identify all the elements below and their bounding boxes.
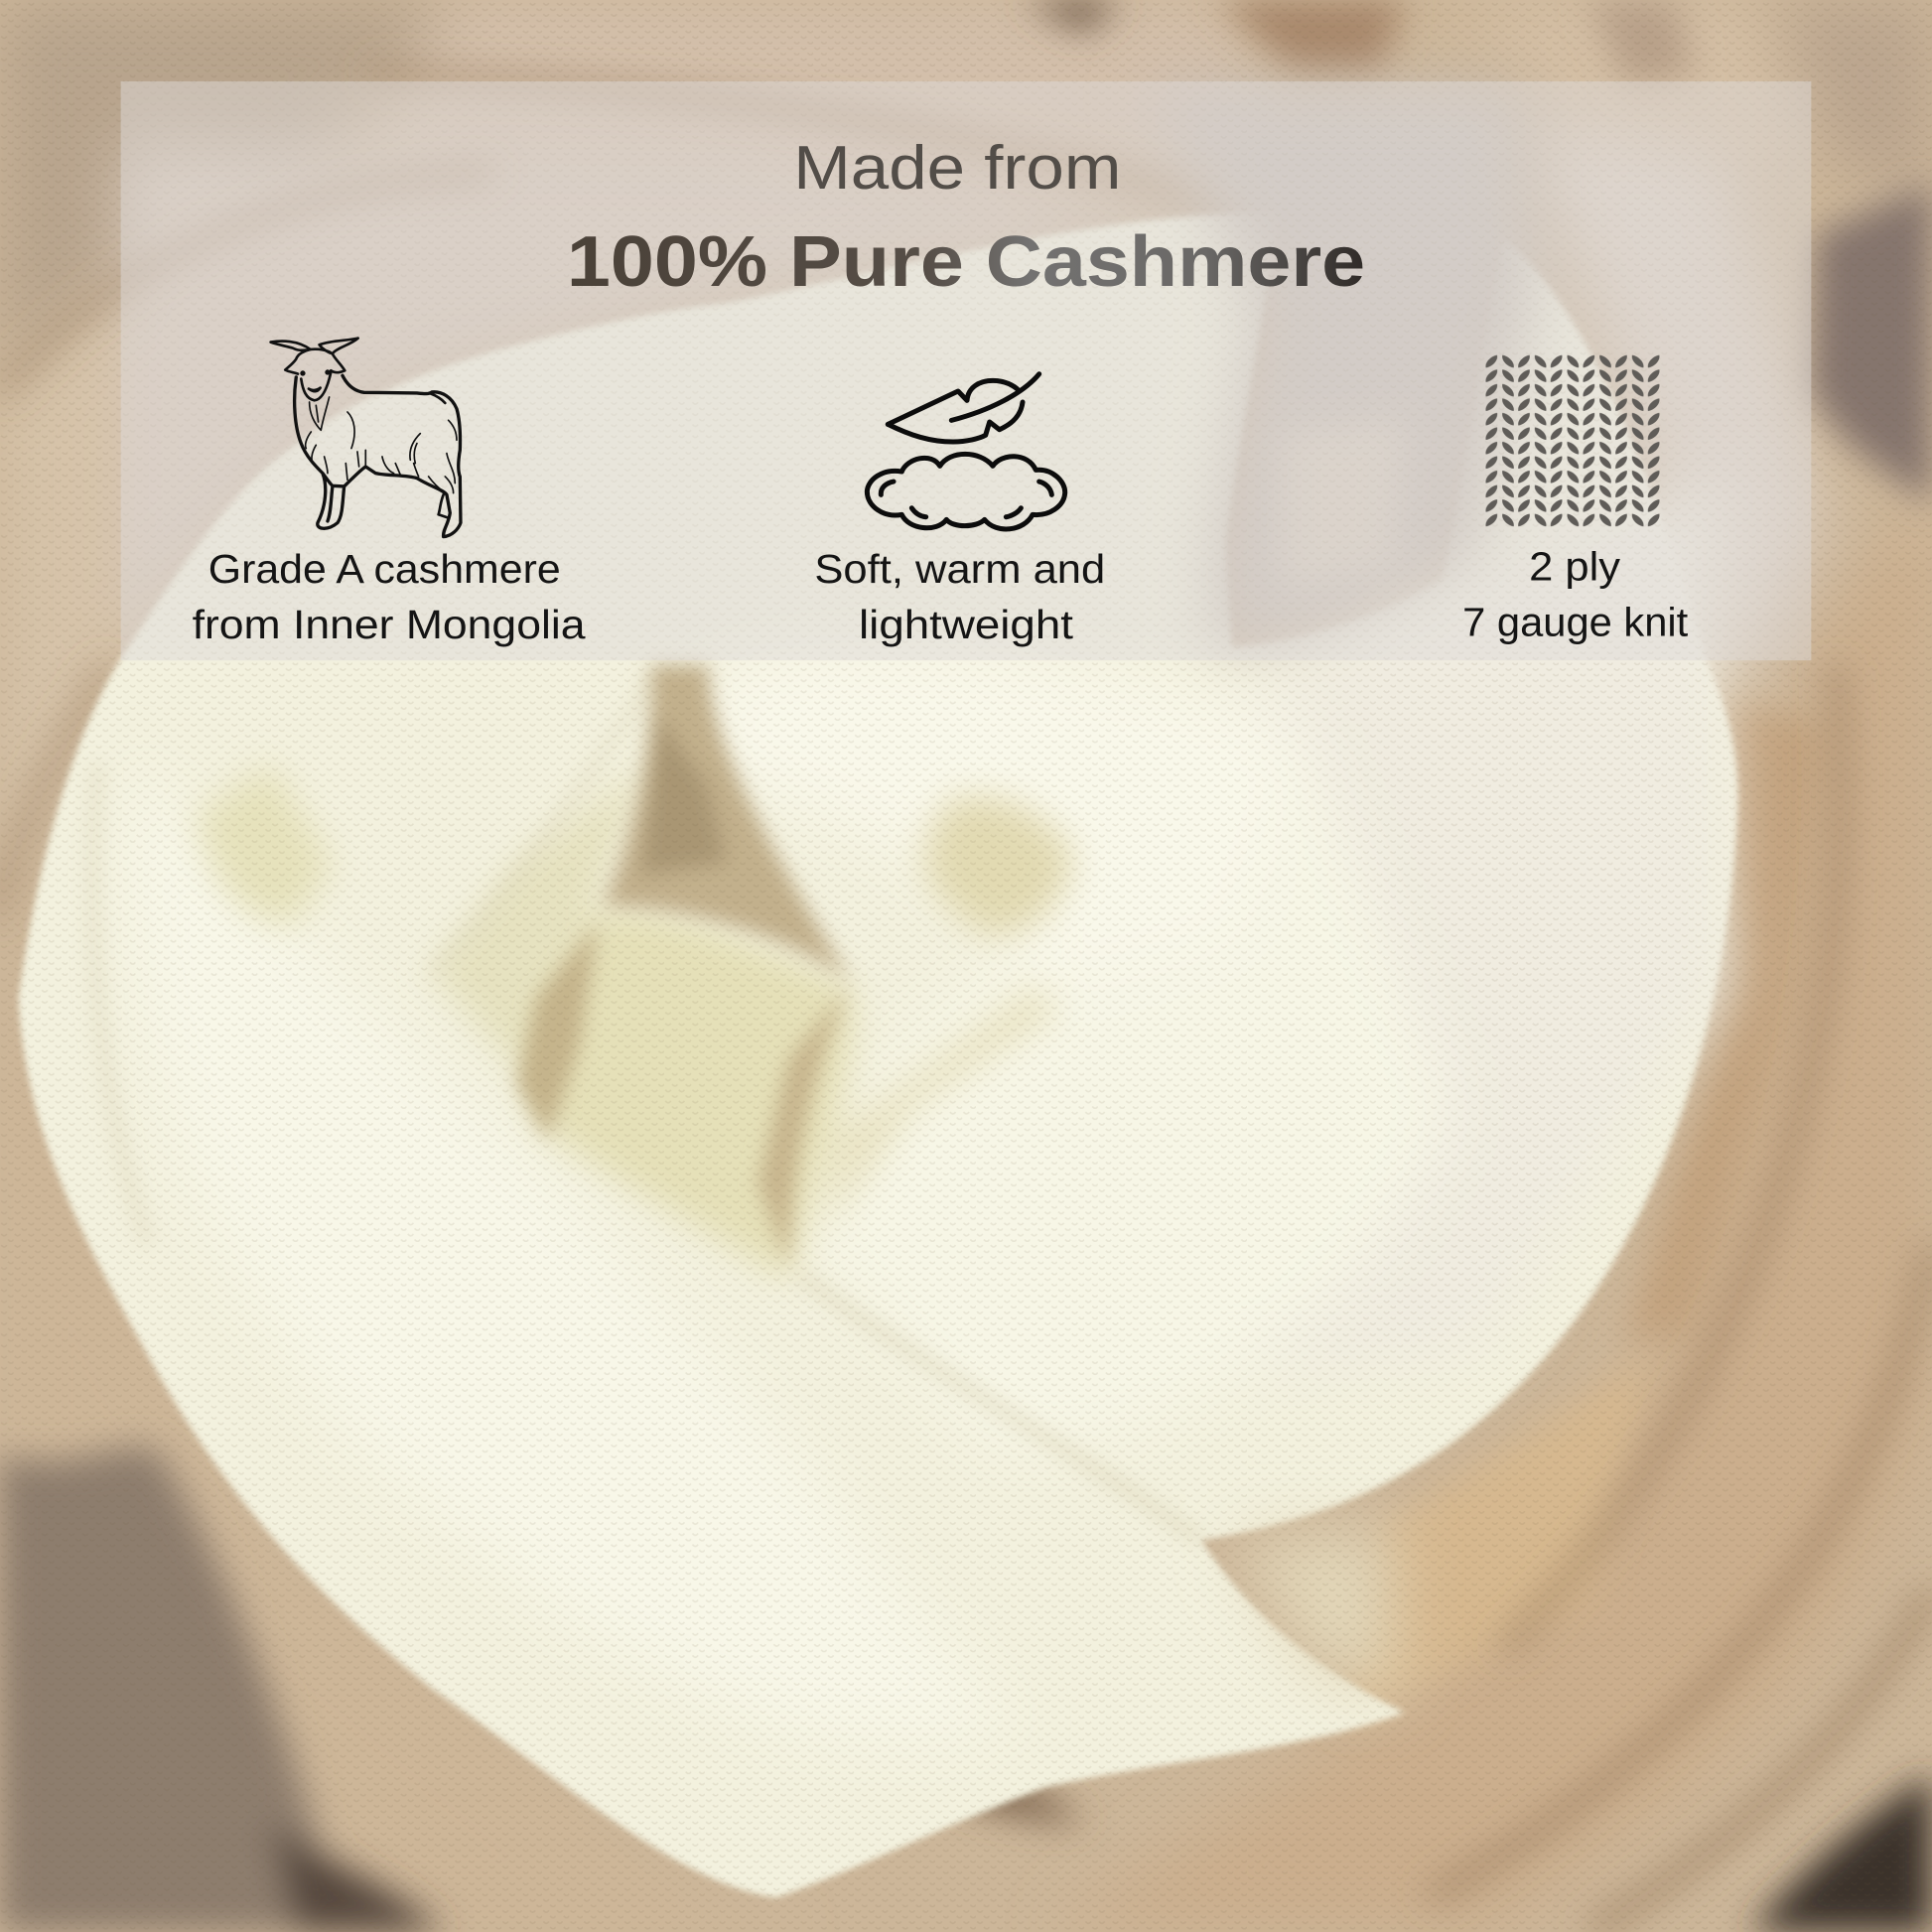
caption: grade A cashmere: from Inner Mongolia [193,602,586,647]
gray fold beneath the panel [1146,86,1540,653]
caption: soft, warm and lightweight: Soft, warm and [814,546,1105,592]
caption: 2 ply 7 gauge knit: 7 gauge knit [1462,599,1689,644]
icon: knit stitch swatch [1483,354,1662,527]
subheading: Made from [793,134,1121,203]
translucent information panel [121,81,1811,660]
caption: 2 ply 7 gauge knit: 2 ply [1529,544,1621,590]
caption: 2 ply 7 gauge knit [1462,544,1689,644]
caption: soft, warm and lightweight: lightweight [859,602,1074,647]
caption: grade A cashmere [193,546,586,647]
caption: soft, warm and lightweight [814,546,1105,647]
icon: goat [271,339,461,537]
title: 100% Pure Cashmere [567,222,1365,302]
cream body of the scarf [19,213,1737,1897]
icon: feather over cloud [867,374,1065,529]
caption: grade A cashmere: Grade A cashmere [208,546,561,592]
